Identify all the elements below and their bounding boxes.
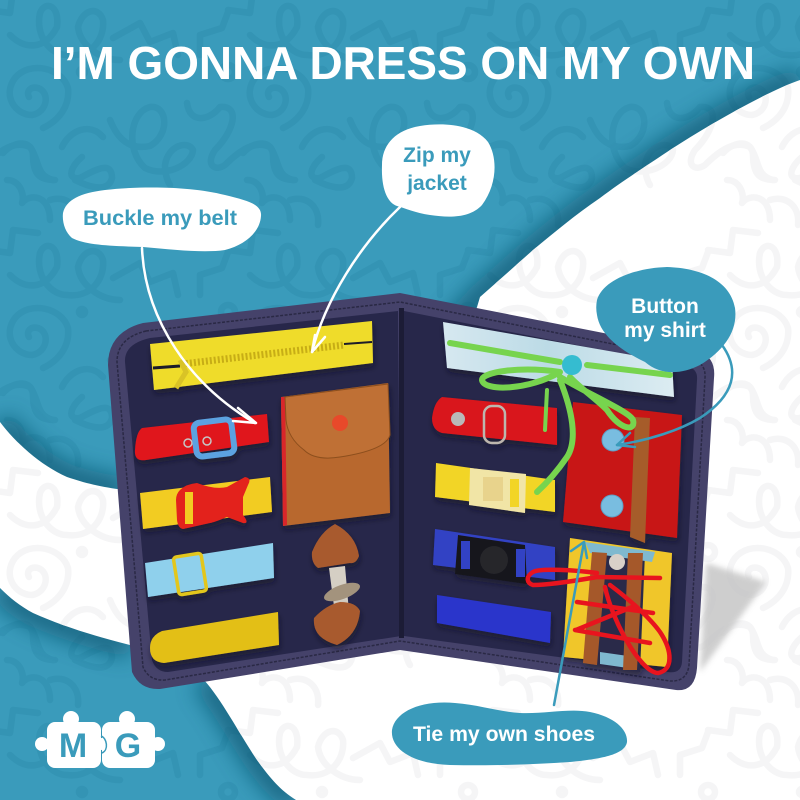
callout: buckle my belt: Buckle my belt [83, 207, 237, 230]
yellow shoe panel [563, 538, 672, 672]
board stitched edge [117, 302, 705, 681]
title: I’M GONNA DRESS ON MY OWN [51, 37, 755, 89]
callout: tie my own shoes [392, 703, 627, 765]
logo: MG puzzle [35, 711, 165, 768]
blue strap with black buckle [433, 529, 555, 584]
red laces [528, 570, 670, 673]
board cover [108, 293, 714, 690]
red belt with blue buckle [135, 414, 269, 460]
zipper [150, 321, 373, 390]
callout: zip my jacket [382, 124, 495, 217]
arrow: buckle to belt [142, 248, 256, 423]
red strap with ring [432, 397, 557, 445]
callout: zip my jacket: jacket [406, 172, 467, 195]
callout: buckle my belt [63, 187, 261, 251]
arrow: button [617, 345, 732, 447]
callout: tie my own shoes: Tie my own shoes [413, 723, 595, 746]
brown pouch [281, 383, 390, 526]
callout: zip my jacket: Zip my [403, 144, 471, 167]
activity board [108, 293, 714, 690]
yellow velcro strip [150, 612, 279, 663]
light blue strap with yellow slider [145, 543, 274, 597]
board shadow [700, 563, 766, 672]
callout: button my shirt [596, 267, 735, 372]
blue velcro strip [437, 595, 551, 643]
leather toggle clasp [312, 524, 362, 645]
green lace bow [450, 343, 670, 492]
callout: button my shirt: my shirt [624, 319, 706, 342]
arrow: shoes [554, 542, 587, 705]
shirt buttons [601, 429, 624, 517]
spine [399, 308, 404, 638]
arrow: zip [312, 207, 400, 352]
logo: MG puzzle: G [115, 727, 141, 765]
yellow strap with cream buckle [435, 463, 555, 513]
left inner panel [125, 311, 401, 672]
red shirt flap [563, 402, 682, 543]
right inner panel [404, 311, 697, 672]
callout: button my shirt: Button [631, 295, 699, 318]
logo: MG puzzle: M [59, 727, 87, 765]
blue lace toggle [562, 355, 582, 375]
yellow strap with red buckle [140, 477, 272, 529]
light blue ribbon [443, 322, 674, 397]
